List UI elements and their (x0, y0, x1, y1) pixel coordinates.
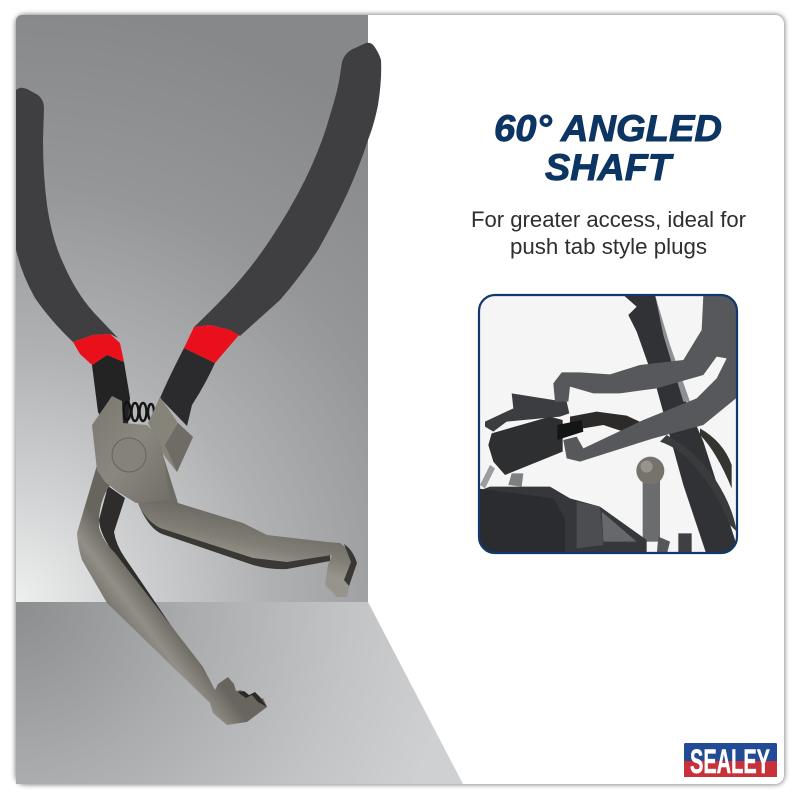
pivot rivet (112, 438, 146, 472)
body text: push tab style plugs (510, 234, 707, 259)
left jaw (77, 455, 267, 725)
right jaw underside (138, 503, 330, 569)
lower jaw inner shadow (99, 486, 173, 628)
right jaw (138, 457, 351, 597)
right handle grip (194, 43, 381, 336)
right red sleeve (184, 325, 239, 363)
left shaft (92, 355, 130, 425)
floor (16, 602, 463, 784)
body text (471, 207, 746, 259)
spring (124, 402, 154, 421)
panel: studio background (16, 15, 463, 784)
heading: 60° ANGLED (494, 108, 722, 149)
cable (570, 412, 640, 431)
heading (494, 108, 722, 188)
frame strip (623, 295, 737, 555)
body text: For greater access, ideal for (471, 207, 746, 232)
panel: photo inset (477, 294, 740, 555)
icon: pliers (16, 43, 381, 725)
wing (148, 397, 193, 472)
hook dark edge (344, 544, 357, 586)
lower housing (477, 487, 647, 555)
back wall (16, 15, 368, 602)
right shaft (160, 348, 215, 426)
jaw teeth (238, 691, 267, 707)
rod and ball (643, 478, 660, 542)
connector (485, 393, 569, 432)
twisted wire (660, 435, 737, 532)
tool (553, 295, 740, 462)
small rod (480, 465, 495, 488)
pivot plate (92, 396, 170, 503)
left handle grip (16, 88, 118, 342)
left red sleeve (73, 334, 124, 365)
heading: SHAFT (545, 147, 674, 188)
photo border (479, 295, 737, 553)
